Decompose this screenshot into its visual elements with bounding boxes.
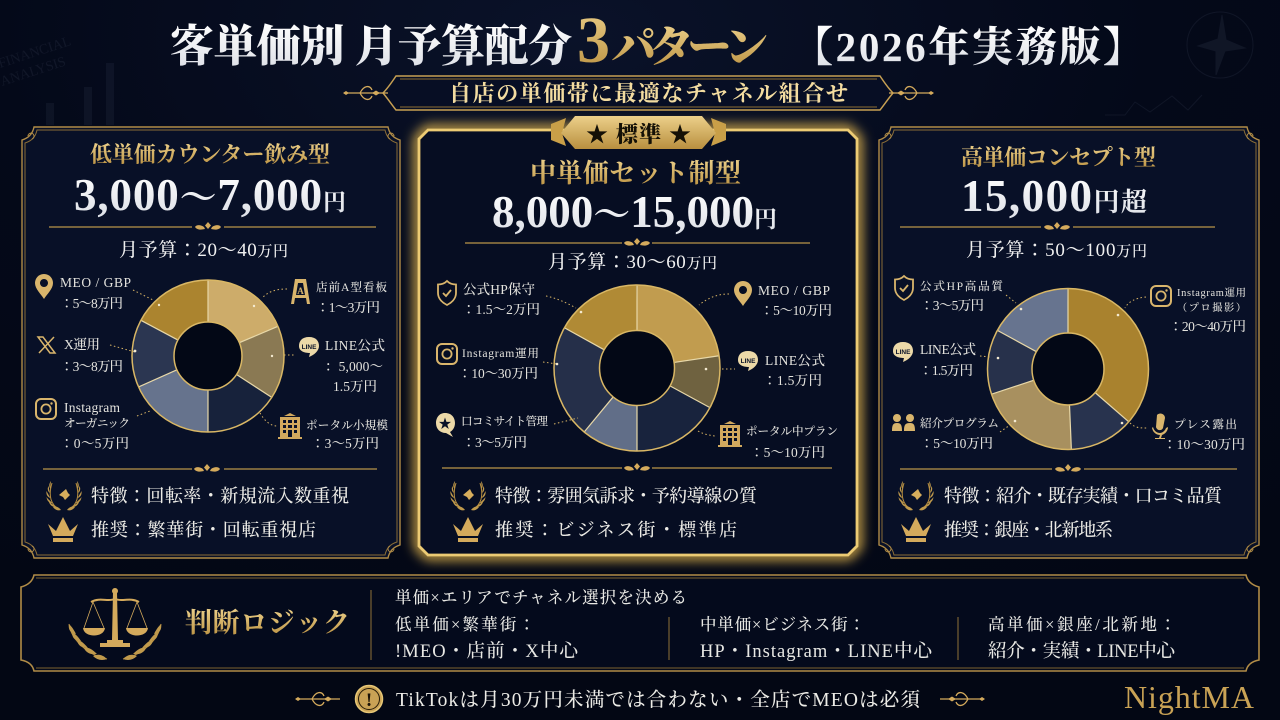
label: LINE: LINE公式 (920, 342, 976, 357)
label: MEO (35, 274, 160, 311)
recommend row: 推奨：繁華街・回転重視店 (91, 519, 316, 540)
divider lower (43, 464, 377, 472)
label: referral (892, 414, 1016, 451)
label: LINE: ：1.5万円 (763, 373, 822, 388)
icon: exclamation (356, 686, 382, 712)
label: Instagram: ：0〜5万円 (60, 436, 129, 451)
recommend row: 推奨：ビジネス街・標準店 (495, 519, 737, 540)
title: パターン (612, 23, 768, 72)
label: portal: ：5〜10万円 (750, 445, 825, 460)
price: 3,000〜7,000円 (74, 170, 346, 220)
divider (49, 222, 376, 230)
feature row: 特徴：回転率・新規流入数重視 (91, 485, 349, 506)
label: portal: ：3〜5万円 (311, 436, 379, 451)
label: LINE: 1.5万円 (333, 379, 377, 394)
badge (551, 116, 726, 149)
logic column 1 (395, 614, 579, 662)
label: A sign: ：1〜3万円 (316, 300, 380, 315)
label: LINE: LINE (741, 358, 756, 365)
donut chart (988, 288, 1148, 450)
footer warning (295, 686, 985, 712)
heading: 中単価セット制型 (530, 159, 741, 188)
label: official HP (895, 276, 1022, 313)
budget: 月予算：30〜60万円 (548, 251, 717, 273)
recommend row (48, 517, 316, 542)
label: LINE: LINE (896, 349, 911, 356)
panel: low price counter (22, 127, 400, 558)
logic column 3: 高単価×銀座/北新地： (988, 615, 1176, 634)
intro text: 単価×エリアでチャネル選択を決める (395, 588, 687, 607)
badge: ★ 標準 ★ (586, 122, 691, 147)
faint backdrop: financial analysis: ANALYSIS (0, 55, 68, 90)
label: Instagram (36, 399, 150, 451)
brand logo: NightMA (1124, 679, 1254, 715)
label: Instagram: （プロ撮影） (1177, 301, 1246, 314)
feature row (898, 481, 1223, 510)
label: press (1121, 414, 1245, 452)
label: Instagram: オーガニック (64, 417, 130, 430)
divider (900, 222, 1215, 230)
label: press: プレス露出 (1174, 417, 1237, 431)
divider (465, 238, 810, 246)
recommend row (453, 517, 737, 542)
label: portal (698, 421, 838, 460)
label: LINE: LINE公式 (325, 338, 385, 353)
title: 3 (577, 4, 610, 77)
label: official HP: 公式HP保守 (463, 281, 535, 297)
laurel branches (69, 624, 107, 660)
title: 【2026年実務版】 (792, 24, 1144, 70)
budget: 月予算：20〜40万円 (119, 239, 288, 261)
label: review sites: 口コミサイト管理 (461, 414, 548, 428)
label: portal: ポータル中プラン (746, 424, 838, 438)
label: portal (260, 413, 388, 451)
flourish left (295, 693, 340, 705)
label: MEO: MEO / GBP (60, 275, 131, 290)
donut chart (554, 285, 720, 451)
panel: mid price set (419, 116, 857, 555)
icon: exclamation: ! (366, 690, 372, 711)
label: MEO (699, 281, 832, 318)
logic column 2: 中単価×ビジネス街： (700, 615, 865, 634)
label: official HP: ：3〜5万円 (920, 298, 984, 313)
title: 客単価別 月予算配分 (170, 22, 572, 71)
banner arrow left (343, 87, 388, 99)
logic column 3 (988, 615, 1176, 662)
subtitle banner (343, 76, 934, 110)
icon: scales (69, 588, 161, 660)
label: Instagram: ：10〜30万円 (458, 366, 538, 381)
label: X (38, 337, 136, 374)
label: official HP: 公式HP高品質 (920, 279, 1004, 293)
label: MEO: ：5〜8万円 (60, 296, 123, 311)
label: LINE (705, 351, 825, 388)
label: MEO: MEO / GBP (758, 283, 830, 298)
recommend row (901, 517, 1113, 542)
banner arrow right (889, 87, 934, 99)
label: review sites: ★ (438, 416, 452, 431)
label: X: X運用 (64, 337, 100, 352)
faint backdrop: financial analysis (0, 34, 114, 125)
label: referral: 紹介プログラム (920, 416, 999, 430)
heading: 高単価コンセプト型 (961, 145, 1156, 170)
label: official HP (438, 281, 582, 317)
title (170, 4, 1144, 77)
label: LINE: LINE (302, 344, 317, 351)
recommend row: 推奨：銀座・北新地系 (944, 520, 1113, 540)
price: 8,000〜15,000円 (492, 187, 777, 237)
label: Instagram: Instagram運用 (462, 347, 539, 360)
heading: 判断ロジック (185, 608, 350, 638)
logic column 3: 紹介・実績・LINE中心 (988, 641, 1176, 662)
logic column 1: 低単価×繁華街： (395, 614, 535, 634)
label: MEO: ：5〜10万円 (760, 303, 832, 318)
logic column 2 (700, 615, 933, 662)
label: LINE: LINE公式 (765, 353, 825, 368)
faint backdrop: compass (1105, 12, 1253, 115)
feature row: 特徴：紹介・既存実績・口コミ品質 (944, 486, 1223, 506)
label: official HP: ：1.5〜2万円 (462, 302, 540, 317)
label: LINE (271, 337, 385, 394)
label: Instagram: Instagram運用 (1177, 287, 1246, 299)
logic column 1: !MEO・店前・X中心 (395, 640, 579, 662)
panel: decision logic (21, 575, 1259, 671)
label: A sign (253, 279, 387, 315)
label: referral: ：5〜10万円 (920, 436, 993, 451)
label: A sign: A (297, 286, 304, 296)
feature row (450, 481, 758, 510)
label: LINE: ：1.5万円 (919, 363, 973, 378)
label: Instagram (1117, 286, 1246, 334)
price: 15,000円超 (961, 171, 1147, 221)
divider lower (442, 463, 832, 471)
label: press: ：10〜30万円 (1163, 437, 1245, 452)
label: LINE: ：5,000〜 (325, 359, 383, 374)
divider lower (900, 464, 1237, 472)
flourish right (940, 693, 985, 705)
panel: high price concept (879, 127, 1259, 558)
feature row: 特徴：雰囲気訴求・予約導線の質 (495, 485, 758, 506)
subtitle text: 自店の単価帯に最適なチャネル組合せ (449, 81, 848, 106)
label: review sites (436, 413, 578, 450)
heading: 低単価カウンター飲み型 (90, 142, 330, 167)
logic column 2: HP・Instagram・LINE中心 (700, 641, 933, 662)
label: Instagram (437, 344, 558, 381)
label: X: ：3〜8万円 (60, 359, 123, 374)
feature row (46, 481, 349, 510)
donut chart (132, 280, 284, 432)
footer text: TikTokは月30万円未満では合わない・全店でMEOは必須 (396, 689, 920, 711)
label: Instagram: Instagram (64, 400, 120, 415)
label: A sign: 店前A型看板 (316, 280, 387, 294)
budget: 月予算：50〜100万円 (966, 239, 1147, 261)
label: LINE (893, 342, 999, 378)
label: portal: ポータル小規模 (306, 418, 388, 432)
label: Instagram: ：20〜40万円 (1169, 319, 1246, 334)
label: review sites: ：3〜5万円 (462, 435, 527, 450)
